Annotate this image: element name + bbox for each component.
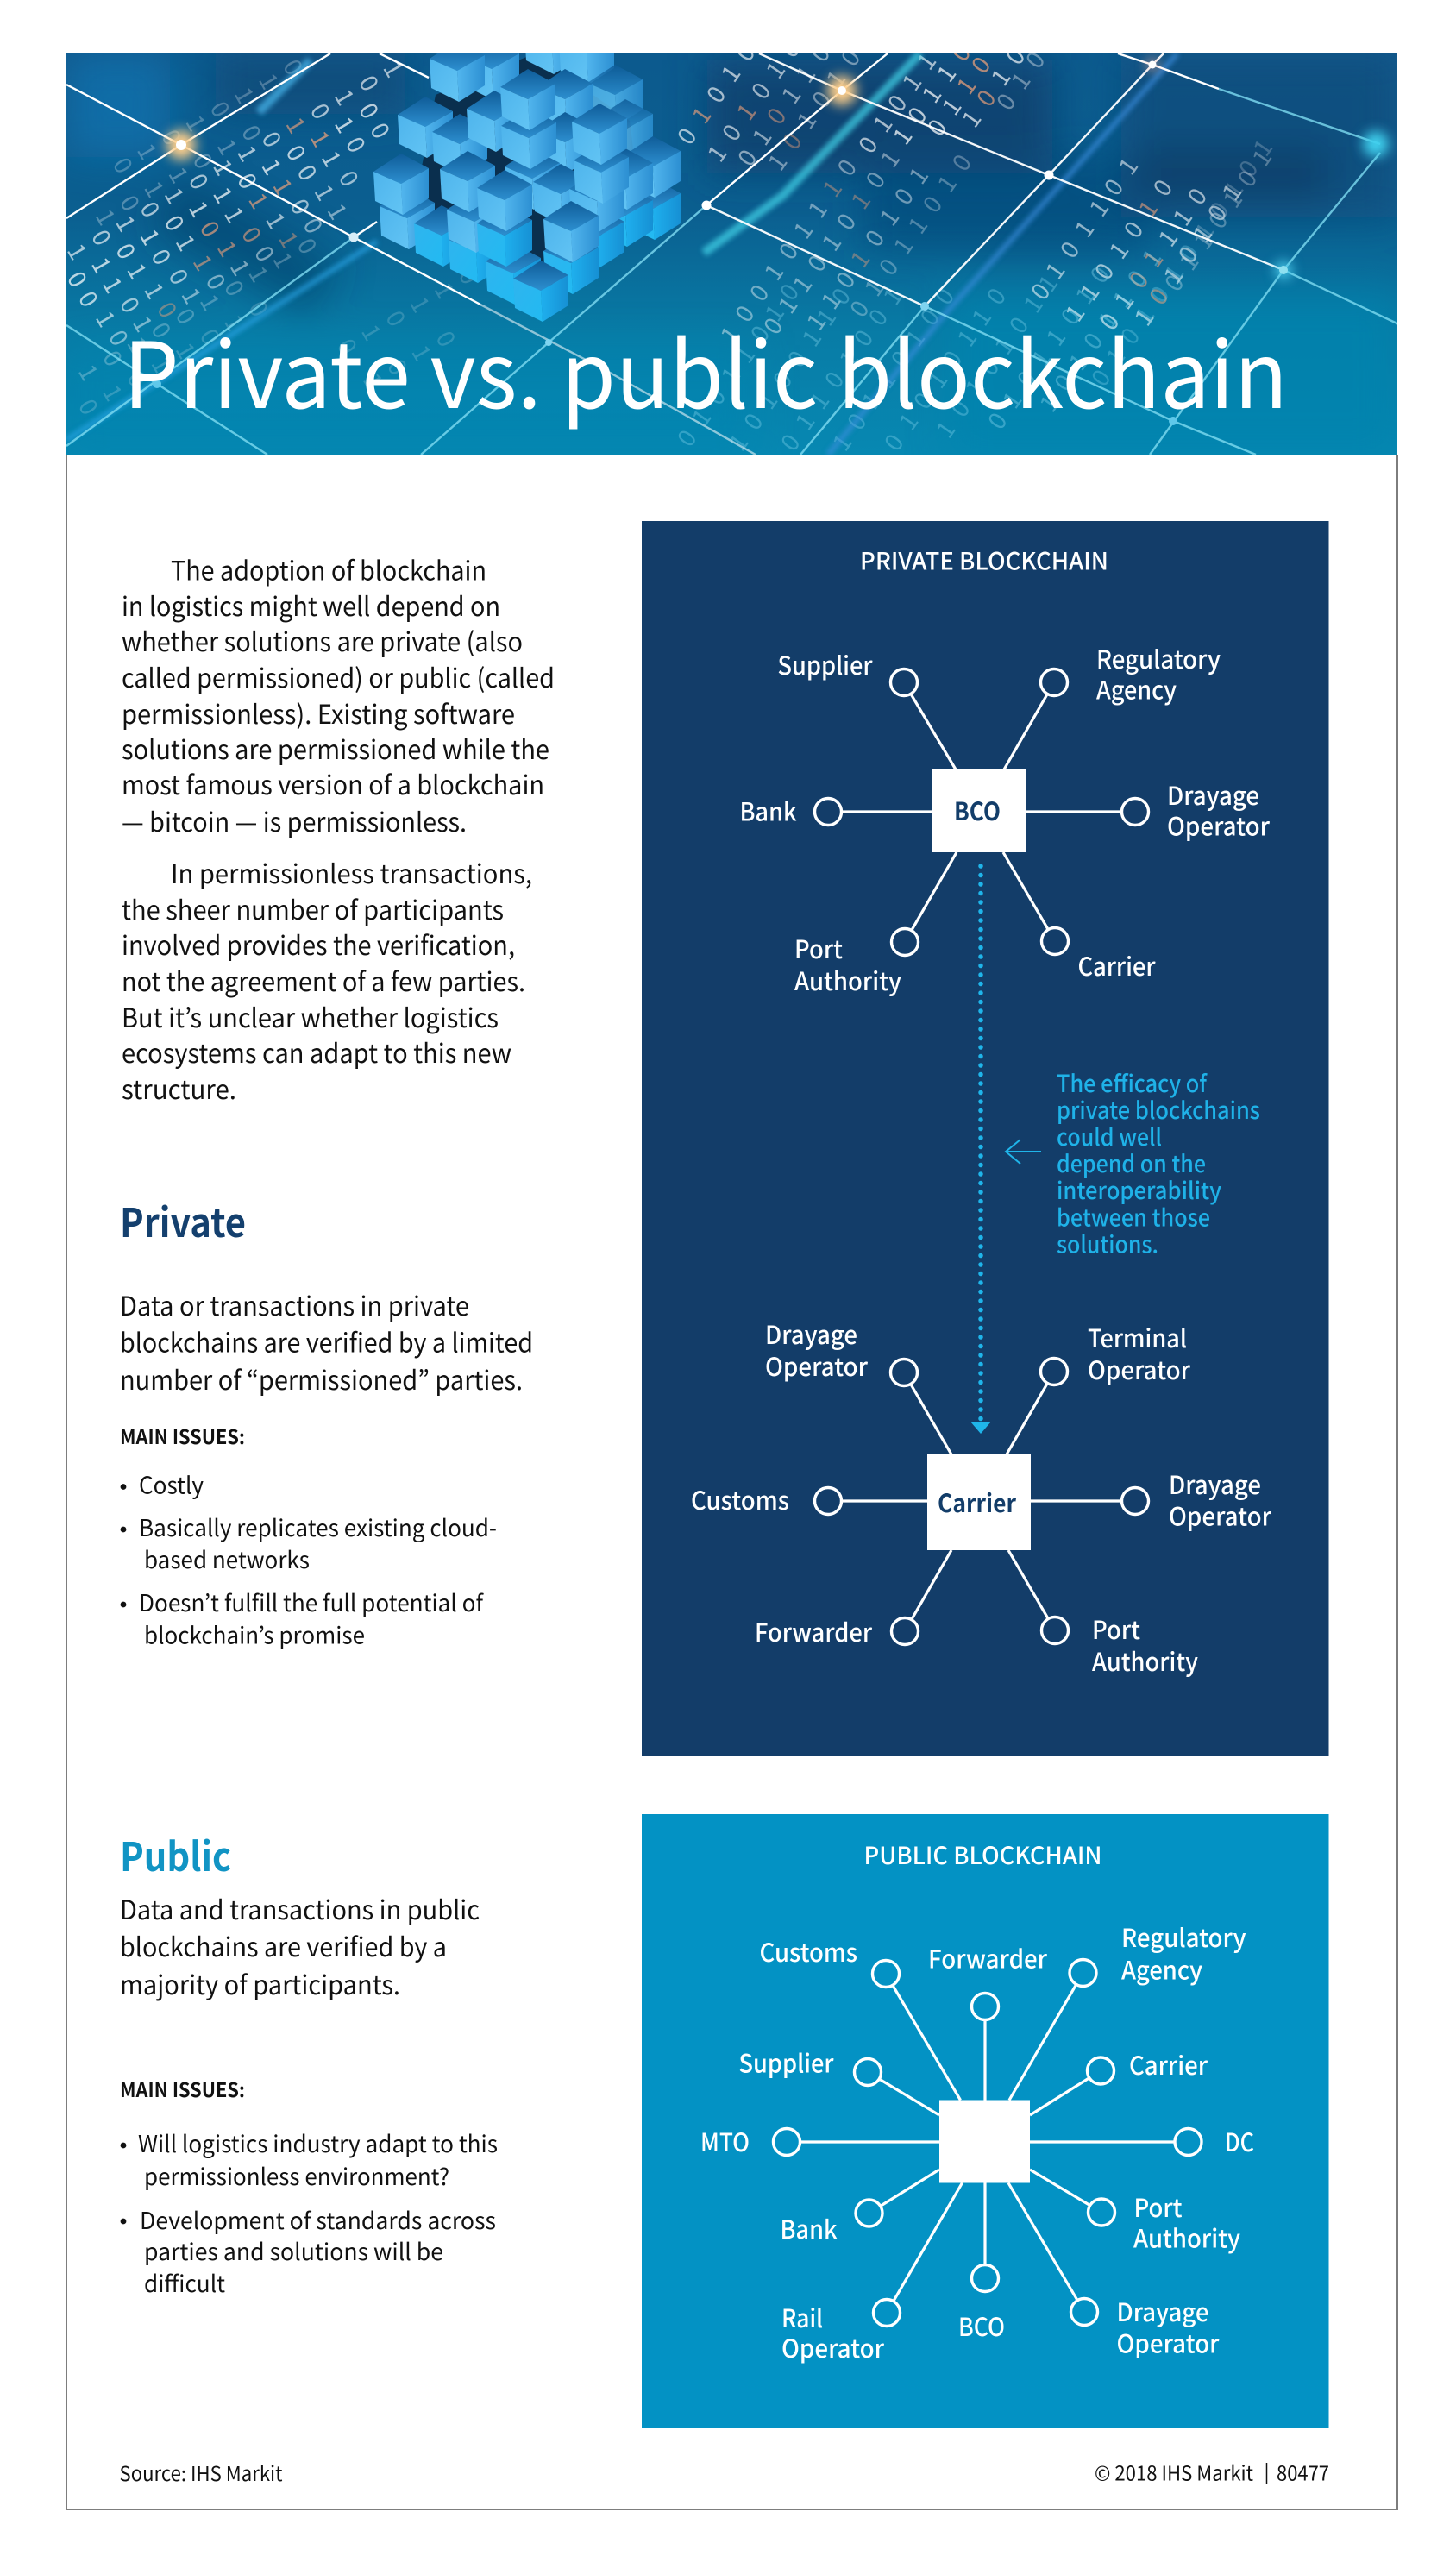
bullet list: private issues: Basically replicates existing cloud-	[139, 1510, 497, 1543]
header banner: 10101	[953, 9, 1054, 134]
header banner: 01011010	[841, 137, 986, 323]
header banner: 100101110	[712, 141, 871, 349]
bullet list: public issues: parties and solutions will be	[144, 2233, 443, 2267]
header banner: 1010010110	[71, 231, 334, 399]
diagram: public network hub: MTO	[700, 2123, 750, 2159]
section: public description	[120, 1826, 498, 2299]
callout text: solutions.	[1057, 1225, 1158, 1259]
bullet list: private issues: based networks	[144, 1542, 310, 1575]
callout text	[1057, 1064, 1260, 1259]
diagram: Carrier hub: Operator	[765, 1347, 868, 1384]
diagram: public network hub: Operator	[1116, 2324, 1220, 2360]
header banner: 0101010	[1083, 227, 1213, 393]
diagram: public network hub: Customs	[759, 1933, 857, 1969]
copyright note: 80477	[1277, 2457, 1329, 2486]
panel heading: PUBLIC BLOCKCHAIN	[864, 1837, 1102, 1872]
heading: Private: Private	[120, 1192, 246, 1249]
text block: public definition: Data and transactions in public	[120, 1889, 480, 1927]
header banner: 101010	[759, 32, 875, 177]
header banner: 1011010	[88, 118, 278, 244]
callout text: could well	[1057, 1118, 1162, 1152]
diagram: Carrier hub: Forwarder	[755, 1613, 872, 1649]
bullet list: public issues: Will logistics industry adapt to this	[138, 2126, 498, 2159]
header banner: 10101101	[1031, 232, 1176, 418]
diagram: public network hub: Regulatory	[1121, 1919, 1246, 1955]
section: private description	[120, 1192, 533, 1651]
intro text: called permissioned) or public (called	[122, 657, 555, 695]
diagram: BCO hub: Regulatory	[1096, 640, 1221, 676]
intro text: solutions are permissioned while the	[122, 729, 549, 767]
header banner: 10101011	[927, 258, 1072, 444]
header banner: 10101011010101	[60, 54, 420, 279]
intro text: The adoption of blockchain	[171, 550, 486, 588]
panel: public blockchain	[642, 1814, 1328, 2428]
title: Private vs. public blockchain	[123, 302, 1288, 435]
diagram: BCO hub: Port	[794, 930, 843, 966]
copyright note: © 2018 IHS Markit	[1095, 2457, 1253, 2486]
diagram: Carrier hub: Drayage	[1169, 1466, 1261, 1502]
diagram: Carrier hub: Customs	[691, 1481, 789, 1517]
header banner: 10101101010	[88, 164, 375, 346]
header banner: 010110	[729, 28, 844, 173]
intro text	[122, 550, 555, 1107]
diagram: public network hub	[700, 1919, 1254, 2365]
diagram: public network hub: Drayage	[1116, 2293, 1209, 2329]
arrow: callout pointer	[1006, 1140, 1041, 1164]
text block: private definition: blockchains are verified by a limited	[120, 1322, 533, 1360]
diagram: Carrier hub	[691, 1316, 1271, 1679]
bullet list: private issues: Costly	[139, 1466, 204, 1501]
diagram: public network hub: Rail	[781, 2299, 823, 2335]
bullet list: private issues	[121, 1466, 497, 1651]
bullet list: public issues	[121, 2126, 498, 2299]
diagram: public network hub: Agency	[1121, 1951, 1202, 1988]
intro text: — bitcoin — is permissionless.	[122, 801, 467, 839]
intro text: structure.	[122, 1069, 236, 1107]
header banner: 01011010	[71, 294, 285, 434]
intro text: ecosystems can adapt to this new	[122, 1033, 511, 1071]
header banner: 0110101	[1156, 132, 1286, 298]
header banner: 010110	[850, 15, 965, 160]
intro text: But it’s unclear whether logistics	[122, 997, 499, 1035]
header banner: 010101	[668, 6, 784, 151]
bullet list: private issues: blockchain’s promise	[144, 1617, 365, 1651]
diagram: Carrier hub: Authority	[1092, 1642, 1198, 1679]
header banner: 0101110	[1091, 171, 1221, 336]
callout text: interoperability	[1057, 1171, 1221, 1206]
intro text: in logistics might well depend on	[122, 586, 500, 624]
diagram: BCO hub: Agency	[1096, 671, 1177, 707]
header banner: 01101001	[772, 271, 917, 457]
text block: public definition	[120, 1889, 480, 2002]
panel: private blockchain	[642, 521, 1328, 1756]
diagram: public network hub: Operator	[781, 2329, 884, 2365]
intro text: permissionless). Existing software	[122, 694, 515, 732]
heading: Public: Public	[120, 1826, 231, 1883]
header banner: 1010	[355, 324, 473, 408]
diagram: BCO hub: Authority	[794, 962, 901, 998]
text block: private definition: Data or transactions in private	[120, 1285, 469, 1323]
subheading: main issues: MAIN ISSUES:	[120, 1421, 245, 1450]
diagram: BCO hub: Carrier	[1078, 947, 1156, 983]
icon: stack of blue cubes	[373, 53, 681, 322]
diagram: public network hub: BCO	[958, 2308, 1005, 2344]
diagram: BCO hub: BCO	[954, 792, 1001, 828]
header banner: 101101	[884, 6, 1000, 151]
diagram: BCO hub: Operator	[1167, 807, 1270, 844]
bullet list: public issues: permissionless environment?	[144, 2158, 449, 2192]
callout text: between those	[1057, 1199, 1210, 1234]
intro text: whether solutions are private (also	[122, 621, 523, 659]
callout text: The efficacy of	[1057, 1064, 1208, 1099]
header banner: 11010101	[798, 150, 943, 336]
header banner: 01011010	[979, 249, 1124, 436]
diagram: Carrier hub: Port	[1092, 1611, 1140, 1647]
diagram: public network hub: Bank	[780, 2210, 838, 2246]
header banner: 101010	[699, 23, 814, 168]
header banner: 1101010	[1057, 162, 1187, 328]
diagram: public network hub: Authority	[1133, 2219, 1240, 2255]
header banner: 011010	[919, 0, 1034, 142]
panel heading: PRIVATE BLOCKCHAIN	[860, 543, 1108, 578]
diagram: Carrier hub: Drayage	[765, 1316, 857, 1352]
diagram: Carrier hub: Operator	[1169, 1498, 1271, 1534]
intro text: the sheer number of participants	[122, 889, 504, 927]
intro text: In permissionless transactions,	[171, 853, 532, 891]
header banner: 0110101110100	[71, 116, 406, 326]
bullet list: private issues: Doesn’t fulfill the full potential of	[139, 1585, 484, 1618]
header banner: 0101011010110	[60, 96, 395, 306]
page frame	[66, 455, 1397, 2509]
arrow: dotted link between hubs	[970, 866, 991, 1434]
header banner: 0101	[988, 13, 1074, 116]
diagram: public network hub: Carrier	[1129, 2046, 1208, 2082]
diagram: BCO hub	[740, 640, 1270, 998]
text block: private definition	[120, 1285, 533, 1397]
diagram: public network hub: Port	[1133, 2189, 1183, 2225]
header banner: 0101010101	[101, 197, 364, 365]
diagram: public network hub: Forwarder	[928, 1939, 1047, 1975]
bullet list: public issues: Development of standards across	[140, 2202, 496, 2236]
diagram: BCO hub: Supplier	[778, 646, 873, 682]
source note: Source: IHS Markit	[119, 2458, 283, 2487]
diagram: Carrier hub: Terminal	[1088, 1319, 1187, 1355]
header banner: 10100110	[720, 271, 865, 457]
callout text: depend on the	[1057, 1145, 1206, 1179]
diagram: Carrier hub: Carrier	[938, 1484, 1016, 1520]
bullet list: public issues: difficult	[144, 2265, 225, 2299]
diagram: BCO hub: Drayage	[1167, 776, 1259, 813]
header banner	[60, 0, 1401, 457]
diagram: public network hub: DC	[1225, 2123, 1254, 2159]
header banner: 1010101	[1126, 166, 1256, 332]
intro text: involved provides the verification,	[122, 925, 515, 963]
header banner: 010110	[329, 261, 495, 374]
intro text: most famous version of a blockchain	[122, 764, 544, 802]
diagram: public network hub: Supplier	[738, 2044, 834, 2081]
header banner: 01010110	[875, 271, 1020, 457]
header banner: 10110100	[824, 271, 969, 457]
header banner: 10101	[1186, 122, 1287, 246]
text block: public definition: blockchains are verified by a	[120, 1926, 447, 1964]
header banner: 01011010	[668, 267, 813, 453]
text block: private definition: number of “permissioned” parties.	[120, 1360, 523, 1397]
header banner: 01010110	[105, 53, 319, 192]
diagram: BCO hub: Bank	[740, 792, 797, 828]
diagram: Carrier hub: Operator	[1088, 1351, 1190, 1387]
header banner: 011010101	[755, 133, 914, 341]
callout text: private blockchains	[1057, 1091, 1260, 1126]
header banner: 0101101	[1022, 141, 1152, 306]
subheading: main issues: MAIN ISSUES:	[120, 2074, 245, 2103]
intro text: not the agreement of a few parties.	[122, 961, 525, 999]
text block: public definition: majority of participants.	[120, 1964, 400, 2002]
